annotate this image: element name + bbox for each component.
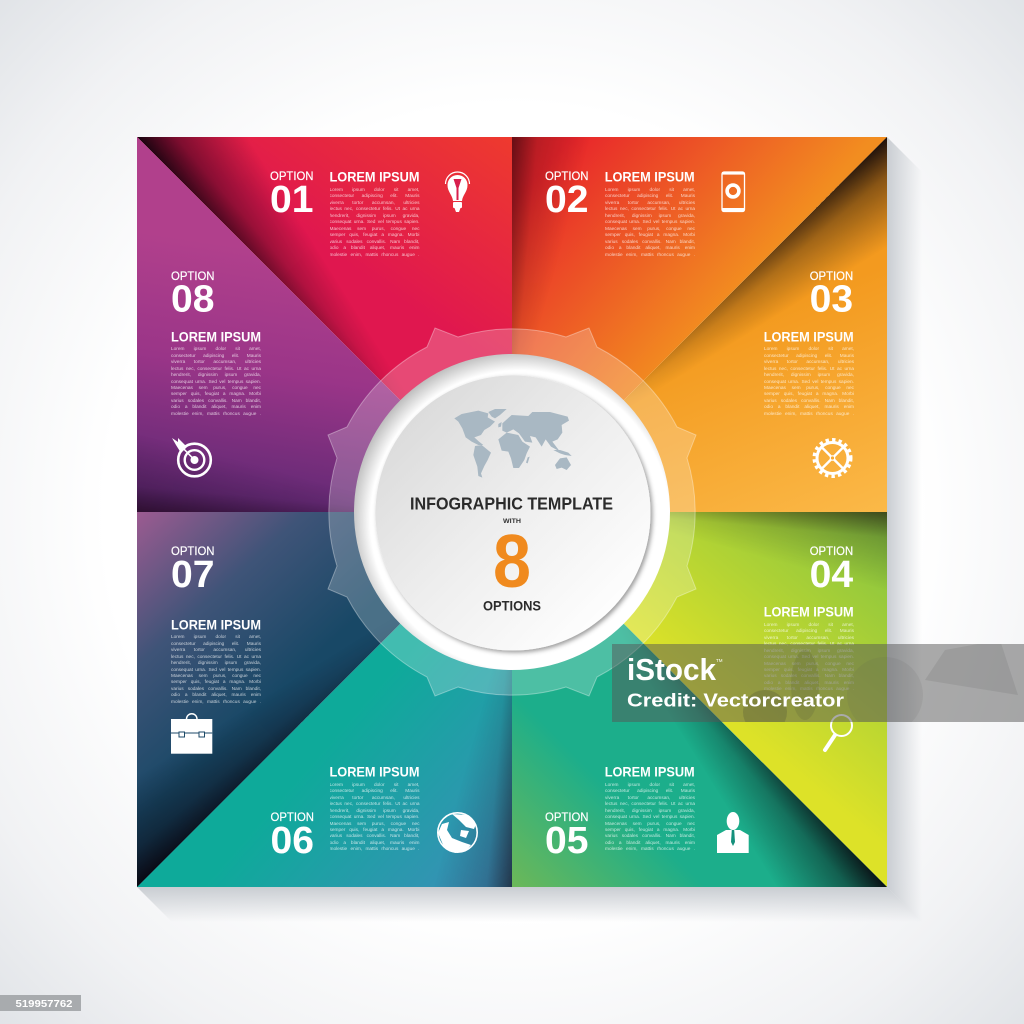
option number: 01 (270, 179, 314, 221)
text block: odio a blandit aliquet, mauris enim (764, 681, 854, 686)
text block (330, 187, 420, 261)
segment 04 background (512, 512, 887, 887)
text block: consequat urna. Sed vel tempus sapien. (605, 220, 695, 225)
text block: molestie enim, mattis rhoncus augue . (764, 687, 854, 692)
text block: Maecenas sem purus, congue nec (171, 674, 261, 679)
text block: viverra tortor accumsan, ultricies (330, 201, 420, 206)
panel: option 01 (270, 168, 470, 261)
option label: OPTION (270, 810, 314, 824)
watermark brand: iStock (627, 652, 717, 687)
heading: LOREM IPSUM (764, 328, 854, 344)
text block: Lorem ipsum dolor sit amet, (605, 188, 695, 193)
text block: hendrerit, dignissim ipsum gravida, (764, 649, 854, 654)
text block: lectus nec, consectetur felis. Ut ac urna (330, 207, 420, 212)
option label: OPTION (810, 269, 853, 283)
text block: molestie enim, mattis rhoncus augue . (171, 700, 261, 705)
text block: Maecenas sem purus, congue nec (605, 227, 695, 232)
text block: semper quis, feugiat a magna. Morbi (171, 392, 261, 397)
panel: option 02 (545, 168, 744, 261)
icon: target (172, 438, 211, 476)
with label: WITH (503, 518, 521, 525)
icon: globe (438, 813, 477, 853)
text block: varius sodales convallis. Nam blandit, (605, 240, 695, 245)
text block: lectus nec, consectetur felis. Ut ac urna (171, 367, 261, 372)
text block (764, 622, 854, 696)
text block: varius sodales convallis. Nam blandit, (605, 834, 695, 839)
text block: consequat urna. Sed vel tempus sapien. (764, 380, 854, 385)
big number 8: 8 (493, 519, 531, 603)
text block: lectus nec, consectetur felis. Ut ac urna (171, 655, 261, 660)
text block: odio a blandit aliquet, mauris enim (330, 841, 420, 846)
panel: option 03 (764, 269, 854, 476)
text block: consequat urna. Sed vel tempus sapien. (605, 815, 695, 820)
heading: LOREM IPSUM (764, 604, 854, 620)
text block: varius sodales convallis. Nam blandit, (171, 399, 261, 404)
option number: 02 (545, 179, 588, 221)
text block: semper quis, feugiat a magna. Morbi (330, 233, 420, 238)
text block: consequat urna. Sed vel tempus sapien. (171, 380, 261, 385)
option label: OPTION (171, 269, 214, 283)
heading: LOREM IPSUM (171, 328, 261, 344)
segment 06 background (137, 512, 512, 887)
text block: viverra tortor accumsan, ultricies (764, 360, 854, 365)
text block: hendrerit, dignissim ipsum gravida, (171, 661, 261, 666)
text block: Lorem ipsum dolor sit amet, (171, 347, 261, 352)
text block: molestie enim, mattis rhoncus augue . (605, 253, 695, 258)
segment 03 background (512, 137, 887, 512)
text block: viverra tortor accumsan, ultricies (764, 636, 854, 641)
heading: LOREM IPSUM (330, 168, 420, 184)
heading: LOREM IPSUM (330, 764, 420, 780)
option label: OPTION (545, 810, 588, 824)
text block: consequat urna. Sed vel tempus sapien. (764, 655, 854, 660)
text block: Maecenas sem purus, congue nec (330, 227, 420, 232)
text block: Maecenas sem purus, congue nec (764, 662, 854, 666)
text block: lectus nec, consectetur felis. Ut ac urna (605, 207, 695, 212)
text block: viverra tortor accumsan, ultricies (605, 796, 695, 801)
icon: magnifier (825, 715, 852, 750)
world map (454, 409, 572, 478)
text block: consectetur adipiscing elit. Mauris (764, 629, 854, 634)
segment 01 background (137, 137, 512, 512)
text block: viverra tortor accumsan, ultricies (171, 648, 261, 653)
panel: option 06 (270, 764, 477, 862)
text block (605, 782, 695, 856)
text block: consequat urna. Sed vel tempus sapien. (330, 220, 420, 225)
segment 07 background (137, 512, 512, 887)
option label: OPTION (270, 169, 314, 183)
text block: odio a blandit aliquet, mauris enim (171, 693, 261, 698)
watermark trademark: TM (716, 658, 723, 663)
fold shadows (137, 137, 887, 887)
text block: varius sodales convallis. Nam blandit, (764, 674, 854, 679)
panel: option 08 (171, 269, 261, 476)
text block: consectetur adipiscing elit. Mauris (605, 789, 695, 794)
text block: molestie enim, mattis rhoncus augue . (605, 847, 695, 852)
text block (605, 187, 695, 261)
text block: Lorem ipsum dolor sit amet, (605, 783, 695, 788)
icon: light bulb (446, 172, 470, 212)
text block (764, 346, 854, 420)
text block: Maecenas sem purus, congue nec (764, 386, 854, 391)
text block: semper quis, feugiat a magna. Morbi (764, 392, 854, 397)
watermark band (612, 644, 1024, 722)
text block: semper quis, feugiat a magna. Morbi (605, 828, 695, 833)
text block: Lorem ipsum dolor sit amet, (764, 347, 854, 352)
text block: semper quis, feugiat a magna. Morbi (330, 828, 420, 833)
option number: 07 (171, 554, 214, 596)
text block: consequat urna. Sed vel tempus sapien. (330, 815, 420, 820)
text block: semper quis, feugiat a magna. Morbi (764, 668, 854, 673)
text block: Maecenas sem purus, congue nec (605, 822, 695, 826)
text block: molestie enim, mattis rhoncus augue . (330, 253, 420, 258)
text block (171, 346, 261, 420)
center heading: INFOGRAPHIC TEMPLATE (410, 494, 613, 514)
text block: molestie enim, mattis rhoncus augue . (330, 847, 420, 852)
panel: option 04 (764, 544, 854, 750)
option number: 03 (810, 278, 853, 320)
segment 08 background (137, 137, 512, 512)
option number: 06 (270, 820, 314, 862)
option number: 08 (171, 278, 214, 320)
watermark credit: Credit: Vectorcreator (627, 690, 844, 710)
text block: odio a blandit aliquet, mauris enim (605, 246, 695, 251)
text block: semper quis, feugiat a magna. Morbi (605, 233, 695, 238)
text block: semper quis, feugiat a magna. Morbi (171, 680, 261, 685)
text block: lectus nec, consectetur felis. Ut ac urna (330, 802, 420, 807)
text block: lectus nec, consectetur felis. Ut ac urna (605, 802, 695, 807)
segment 02 background (512, 137, 887, 512)
square long shadow (137, 137, 922, 922)
text block: varius sodales convallis. Nam blandit, (764, 399, 854, 404)
heading: LOREM IPSUM (605, 168, 695, 184)
text block: odio a blandit aliquet, mauris enim (605, 841, 695, 846)
text block: lectus nec, consectetur felis. Ut ac urna (764, 367, 854, 372)
stock id label: 519957762 (16, 999, 73, 1010)
text block: Maecenas sem purus, congue nec (171, 386, 261, 391)
icon: gear (814, 440, 851, 476)
text block: lectus nec, consectetur felis. Ut ac urna (764, 642, 854, 647)
options label: OPTIONS (483, 598, 541, 614)
text block: odio a blandit aliquet, mauris enim (171, 405, 261, 410)
text block: Lorem ipsum dolor sit amet, (330, 783, 420, 788)
heading: LOREM IPSUM (605, 764, 695, 780)
text block: hendrerit, dignissim ipsum gravida, (764, 373, 854, 378)
heading: LOREM IPSUM (171, 616, 261, 632)
text block: varius sodales convallis. Nam blandit, (330, 240, 420, 245)
text block: odio a blandit aliquet, mauris enim (764, 405, 854, 410)
text block: consectetur adipiscing elit. Mauris (330, 789, 420, 794)
text block: viverra tortor accumsan, ultricies (171, 360, 261, 365)
outer white disc (354, 354, 670, 670)
segment 05 background (512, 512, 887, 887)
option label: OPTION (810, 544, 853, 558)
inner paper disc (376, 376, 650, 650)
option label: OPTION (545, 169, 588, 183)
text block: hendrerit, dignissim ipsum gravida, (605, 809, 695, 814)
text block: consectetur adipiscing elit. Mauris (605, 194, 695, 199)
text block: varius sodales convallis. Nam blandit, (171, 687, 261, 692)
panel: option 05 (545, 764, 749, 862)
text block: consequat urna. Sed vel tempus sapien. (171, 668, 261, 673)
icon: smartphone (722, 172, 744, 212)
text block: molestie enim, mattis rhoncus augue . (764, 412, 854, 417)
option number: 05 (545, 820, 588, 862)
stock id label (0, 995, 81, 1011)
text block: consectetur adipiscing elit. Mauris (764, 354, 854, 359)
text block: viverra tortor accumsan, ultricies (605, 201, 695, 206)
option number: 04 (810, 554, 853, 596)
icon: businessman (717, 812, 749, 853)
text block: consectetur adipiscing elit. Mauris (171, 642, 261, 647)
text block: Lorem ipsum dolor sit amet, (330, 188, 420, 193)
text block: odio a blandit aliquet, mauris enim (330, 246, 420, 251)
text block: consectetur adipiscing elit. Mauris (330, 194, 420, 199)
text block: Lorem ipsum dolor sit amet, (171, 635, 261, 640)
text block: Lorem ipsum dolor sit amet, (764, 623, 854, 628)
translucent gear ring (328, 328, 696, 696)
text block: viverra tortor accumsan, ultricies (330, 796, 420, 801)
text block: hendrerit, dignissim ipsum gravida, (330, 214, 420, 219)
text block (171, 634, 261, 708)
text block: hendrerit, dignissim ipsum gravida, (330, 809, 420, 814)
panel: option 07 (171, 544, 261, 754)
text block: consectetur adipiscing elit. Mauris (171, 354, 261, 359)
text block: varius sodales convallis. Nam blandit, (330, 834, 420, 839)
text block: hendrerit, dignissim ipsum gravida, (171, 373, 261, 378)
option label: OPTION (171, 544, 214, 558)
icon: briefcase (171, 714, 212, 754)
text block (330, 782, 420, 856)
text block: molestie enim, mattis rhoncus augue . (171, 412, 261, 417)
text block: Maecenas sem purus, congue nec (330, 822, 420, 826)
text block: hendrerit, dignissim ipsum gravida, (605, 214, 695, 219)
